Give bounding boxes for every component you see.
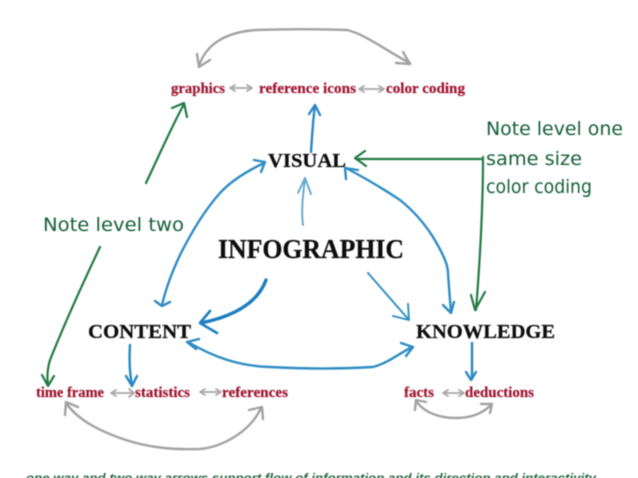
label: statistics: statistics [135,385,190,401]
note: same size: same size [486,148,582,170]
label: color coding: color coding [386,81,466,97]
label: graphics: graphics [171,81,225,97]
label: references: references [222,385,288,401]
arrow: time frame to references [65,402,263,449]
arrow: infographic to visual [298,178,311,225]
arrow: infographic to knowledge [368,273,409,320]
arrow: note level one to visual and knowledge [355,151,485,310]
label: deductions: deductions [465,385,534,401]
arrow: visual and content [155,160,265,306]
label: time frame: time frame [36,385,105,401]
arrow: knowledge to facts [466,343,476,380]
arrow: content to statistics [126,345,137,386]
arrow: visual and knowledge [345,168,454,313]
arrow: visual to reference icons [309,105,320,152]
arrow: infographic to content [200,280,266,333]
arrow: note level two to time frame [42,247,100,386]
arrow: content and knowledge [187,339,413,368]
label: reference icons: reference icons [259,81,356,97]
arrow: facts to deductions [415,400,492,418]
heading: knowledge: KNOWLEDGE [416,321,555,343]
heading: content: CONTENT [88,321,192,343]
heading: visual: VISUAL [268,150,346,172]
arrow: reference icons and color coding [359,86,384,92]
arrow: facts and deductions [443,390,464,396]
arrow: time frame and statistics [111,389,134,397]
heading: infographic: INFOGRAPHIC [218,234,404,264]
arrow: graphics to color coding [197,29,410,67]
note: level two: Note level two [43,214,184,236]
arrow: graphics and reference icons [230,85,252,91]
label: facts: facts [404,385,434,401]
arrow: statistics and references [200,389,221,395]
note: level one: Note level one [486,118,623,140]
note: color coding: color coding [486,176,592,198]
arrow: note level two to graphics [146,103,187,183]
